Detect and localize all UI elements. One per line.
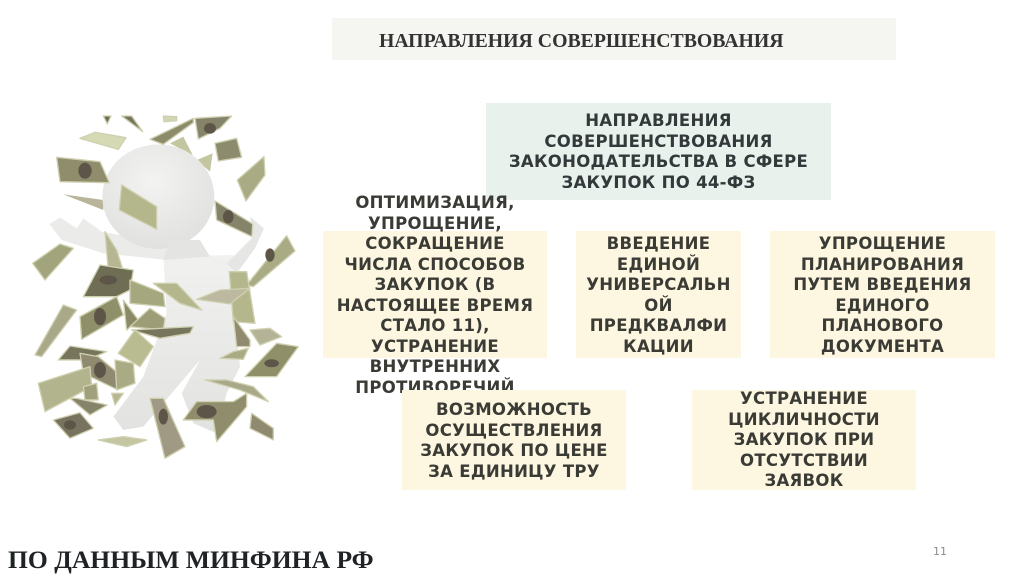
box 4 text: ВОЗМОЖНОСТЬ <box>436 400 592 419</box>
banknote portraits <box>64 123 279 430</box>
box 2 text: ОЙ <box>644 296 673 314</box>
box 1 text: ОПТИМИЗАЦИЯ, <box>355 193 515 212</box>
box 5 text: ЗАКУПОК ПРИ <box>734 430 874 449</box>
box 4 text <box>420 400 608 480</box>
main topic text <box>509 111 808 192</box>
title banner <box>332 18 896 60</box>
box 1 text: УСТРАНЕНИЕ <box>371 336 499 356</box>
box 2 text: ПРЕДКВАЛФИ <box>590 316 727 335</box>
box 3 text: УПРОЩЕНИЕ <box>819 234 946 253</box>
box 4 text: ОСУЩЕСТВЛЕНИЯ <box>425 420 603 440</box>
white figure <box>49 144 264 433</box>
box 5 text <box>728 389 880 490</box>
box 1 text: ЗАКУПОК (В <box>375 275 495 294</box>
source note: ПО ДАННЫМ МИНФИНА РФ <box>8 545 374 574</box>
box 2 text: ЕДИНОЙ <box>617 254 700 274</box>
box 4 text: ЗАКУПОК ПО ЦЕНЕ <box>420 441 608 460</box>
box 5 text: ОТСУТСТВИИ <box>740 450 868 470</box>
box 3 text: ПУТЕМ ВВЕДЕНИЯ <box>793 275 972 294</box>
main topic text: СОВЕРШЕНСТВОВАНИЯ <box>544 132 773 150</box>
box 3: planning <box>770 231 995 358</box>
box 1 text <box>337 193 533 396</box>
box 5: cyclicality <box>692 390 916 490</box>
box 1 text: ЧИСЛА СПОСОБОВ <box>345 254 525 274</box>
main topic box <box>486 103 831 200</box>
box 1 text: ВНУТРЕННИХ <box>370 357 500 376</box>
main topic text: НАПРАВЛЕНИЯ <box>585 111 732 130</box>
box 1 text: СТАЛО 11), <box>380 316 490 335</box>
box 5 text: ЗАЯВОК <box>764 471 844 490</box>
main topic text: ЗАКОНОДАТЕЛЬСТВА В СФЕРЕ <box>509 152 808 171</box>
box 1 text: СОКРАЩЕНИЕ <box>365 234 505 253</box>
box 5 text: ЦИКЛИЧНОСТИ <box>728 410 880 428</box>
box 5 text: УСТРАНЕНИЕ <box>740 389 868 408</box>
box 4: unit price <box>402 390 626 490</box>
title text: НАПРАВЛЕНИЯ СОВЕРШЕНСТВОВАНИЯ <box>379 30 784 52</box>
box 1: optimisation <box>323 231 547 358</box>
box 3 text: ПЛАНОВОГО <box>822 316 943 335</box>
box 2: single qualification <box>576 231 741 358</box>
box 4 text: ЗА ЕДИНИЦУ ТРУ <box>428 462 600 480</box>
box 2 text <box>586 234 731 356</box>
box 3 text: ПЛАНИРОВАНИЯ <box>801 254 964 274</box>
box 2 text: УНИВЕРСАЛЬН <box>586 275 731 294</box>
main topic text: ЗАКУПОК ПО 44-ФЗ <box>561 172 756 192</box>
box 1 text: УПРОЩЕНИЕ, <box>368 214 502 232</box>
box 3 text: ЕДИНОГО <box>835 296 930 314</box>
box 1 text: НАСТОЯЩЕЕ ВРЕМЯ <box>337 296 533 314</box>
box 2 text: ВВЕДЕНИЕ <box>607 234 710 253</box>
box 3 text: ДОКУМЕНТА <box>821 336 944 356</box>
page number: 11 <box>933 545 947 558</box>
box 2 text: КАЦИИ <box>623 336 694 356</box>
box 1 text: ПРОТИВОРЕЧИЙ <box>355 378 515 396</box>
falling banknotes <box>33 116 298 458</box>
box 3 text <box>793 234 972 356</box>
